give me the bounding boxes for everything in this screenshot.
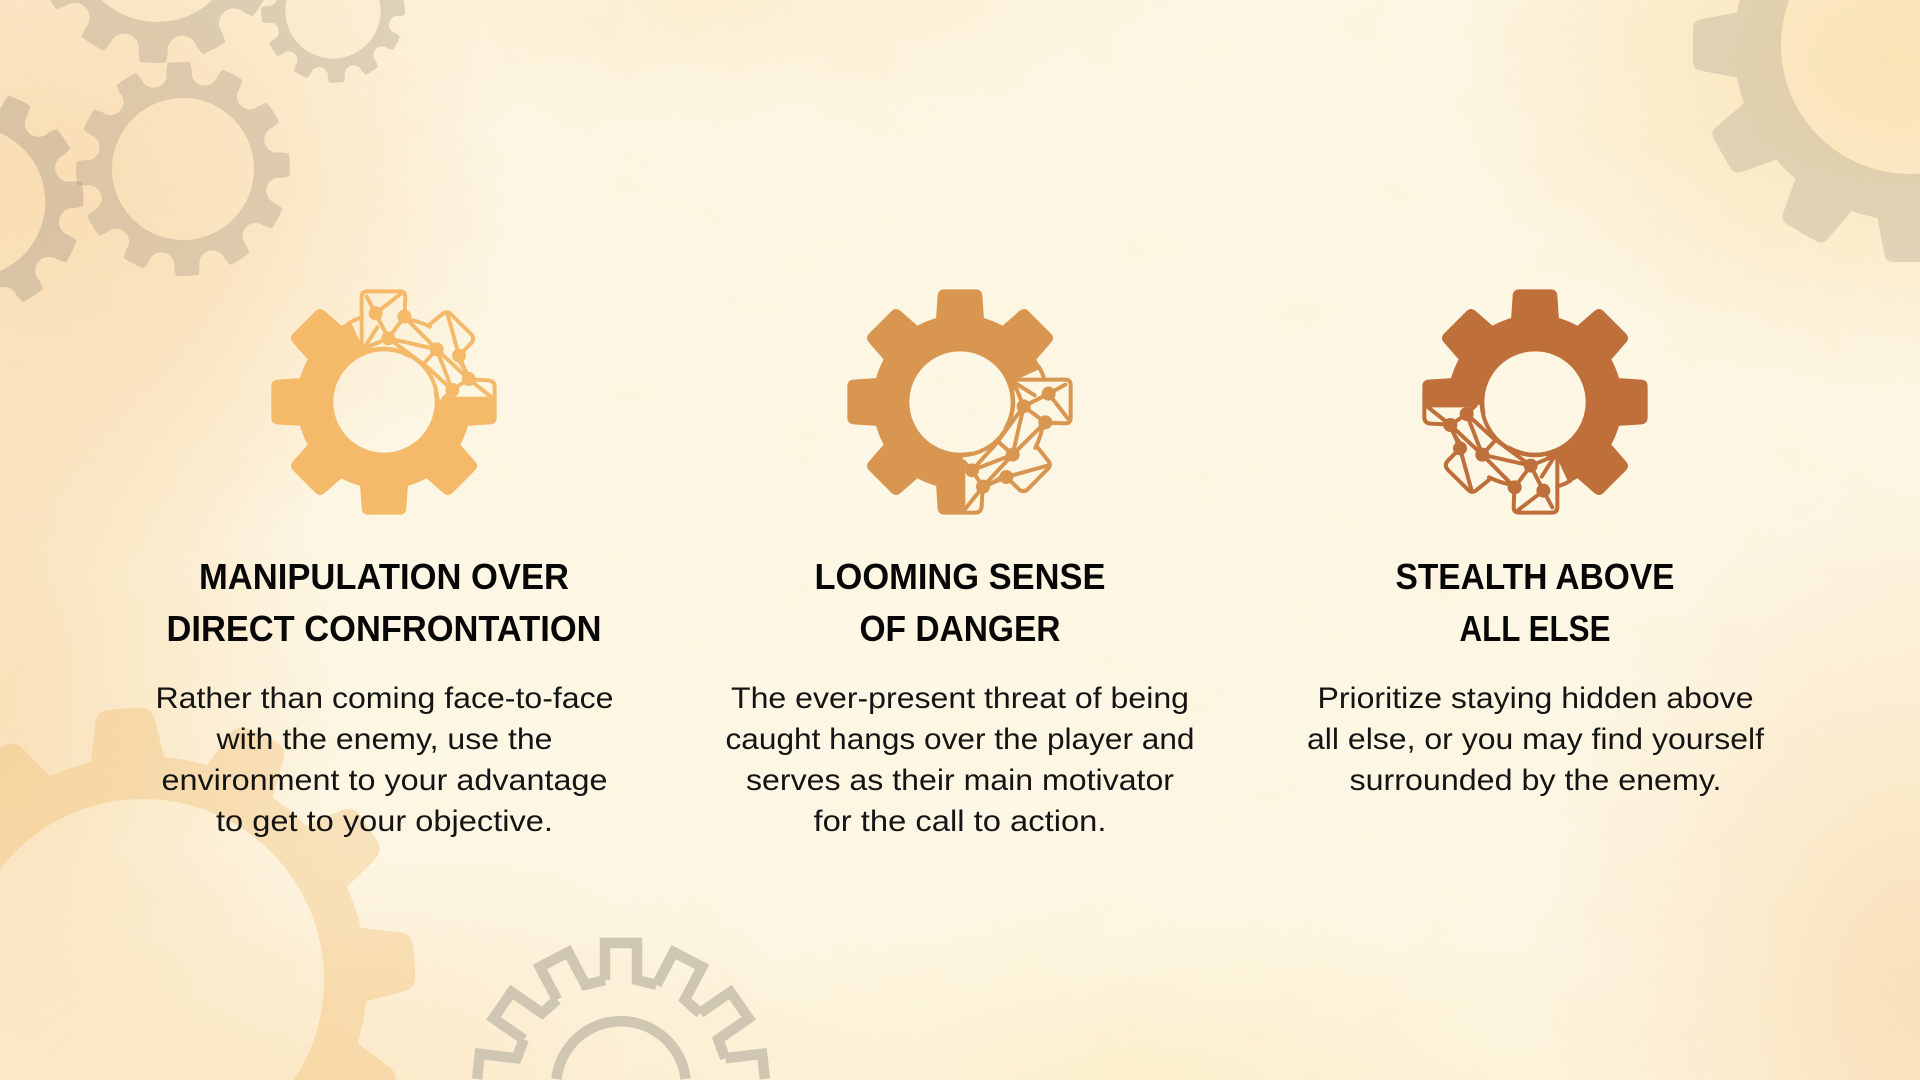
text block: looming description [726, 682, 1194, 838]
text block: manipulation description [156, 682, 614, 838]
text block: stealth description [1307, 682, 1765, 797]
heading: manipulation: DIRECT CONFRONTATION [166, 608, 602, 649]
panel: manipulation over direct confrontation [156, 270, 614, 838]
text block: manipulation description: to get to your objective. [216, 805, 553, 838]
gear: left middle [76, 62, 290, 276]
icon: dark orange gear with network [1391, 270, 1679, 534]
heading: stealth: ALL ELSE [1460, 608, 1610, 649]
gear: top centre-left [50, 0, 264, 63]
text block: stealth description: Prioritize staying hidden above [1318, 682, 1754, 715]
gear: top small [261, 0, 405, 83]
gear: bottom left orange [0, 700, 423, 1080]
heading: looming: LOOMING SENSE [814, 556, 1106, 597]
gear: far left [0, 96, 84, 302]
text block: stealth description: surrounded by the enemy. [1350, 764, 1722, 797]
text block: looming description: caught hangs over the player and [726, 723, 1194, 756]
heading: manipulation: MANIPULATION OVER [199, 556, 569, 597]
heading: manipulation [166, 556, 602, 649]
icon: light orange gear with network [240, 270, 528, 534]
text block: stealth description: all else, or you may find yourself [1307, 723, 1765, 756]
gear: bottom outline [477, 943, 765, 1079]
text block: looming description: The ever-present threat of being [731, 682, 1189, 715]
heading: looming: OF DANGER [860, 608, 1061, 649]
heading: stealth: STEALTH ABOVE [1396, 556, 1674, 597]
text block: manipulation description: environment to your advantage [162, 764, 608, 797]
panel: looming sense of danger [726, 258, 1194, 838]
text block: manipulation description: with the enemy, use the [215, 723, 552, 756]
text block: looming description: serves as their main motivator [746, 764, 1174, 797]
icon: medium orange gear with network [828, 258, 1092, 546]
heading: looming [814, 556, 1106, 649]
gear: top right large [1693, 0, 1920, 262]
heading: stealth [1396, 556, 1674, 649]
panel: stealth above all else [1307, 270, 1765, 797]
text block: looming description: for the call to action. [814, 805, 1106, 838]
text block: manipulation description: Rather than coming face-to-face [156, 682, 614, 715]
